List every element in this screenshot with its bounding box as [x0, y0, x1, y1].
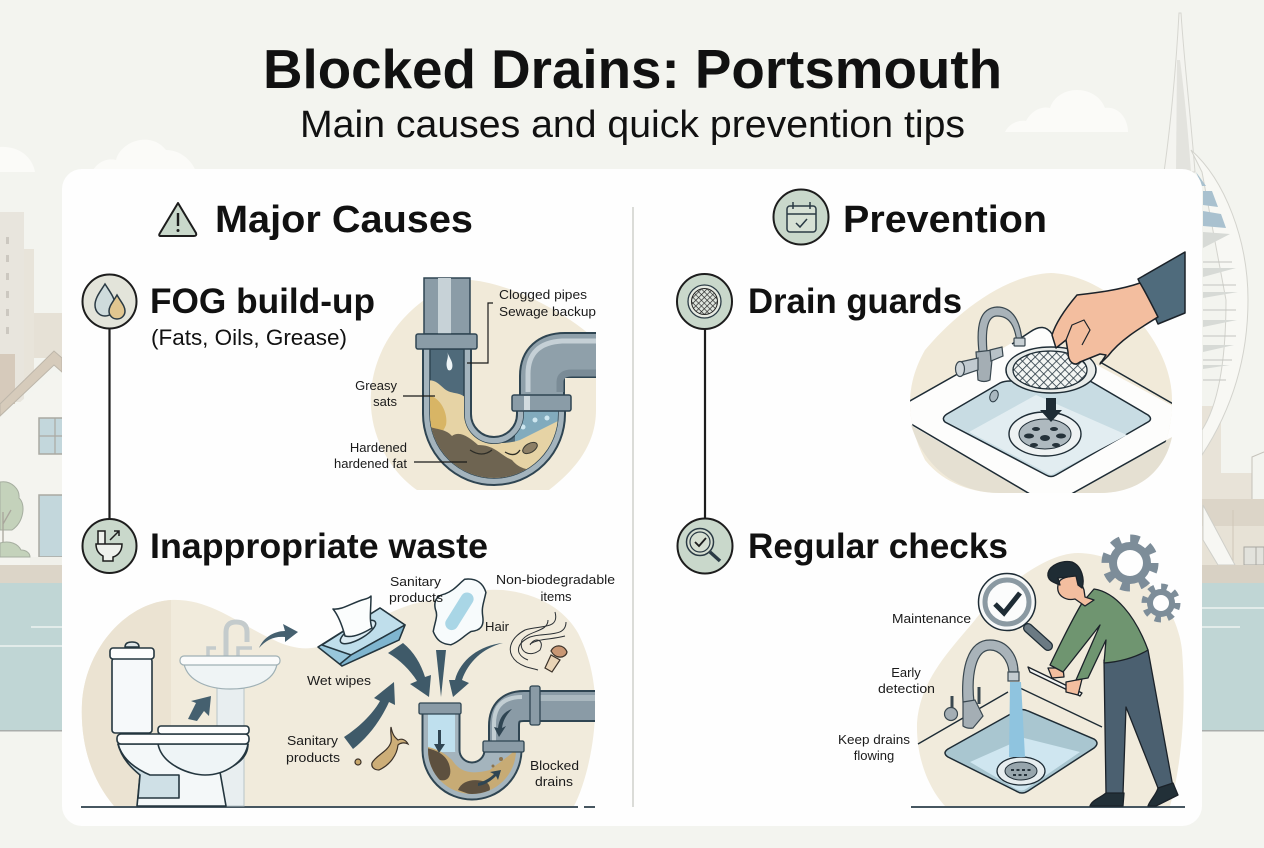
backdrop blob	[917, 553, 1184, 806]
water	[0, 583, 1264, 732]
left trees	[0, 482, 30, 557]
label: hair: Hair	[485, 619, 510, 634]
label: clogged pipes, sewage backup	[467, 287, 596, 363]
label: maintenance: Maintenance	[892, 611, 971, 626]
arrow: pad to drain	[436, 650, 446, 697]
label: non-biodegradable items	[496, 572, 615, 604]
icon: oil drops	[82, 274, 136, 328]
label: early detection	[878, 665, 935, 696]
elbow pipe	[528, 341, 596, 396]
sanitary pad	[418, 568, 501, 656]
label: keep drains flowing: flowing	[854, 748, 894, 763]
icon: magnifier check	[678, 518, 732, 574]
label: clogged pipes, sewage backup: Sewage backup	[499, 304, 596, 319]
timeline connector: prevention	[704, 329, 706, 519]
counter and sink basin	[900, 327, 1180, 497]
hand and sleeve	[1052, 252, 1185, 364]
label: keep drains flowing	[838, 732, 911, 763]
panel: major causes	[81, 199, 615, 807]
clogged U-bend	[425, 712, 520, 800]
left house	[0, 351, 63, 565]
main card	[62, 169, 1202, 826]
heading: regular checks: Regular checks	[748, 527, 1008, 566]
trousers	[1104, 650, 1173, 794]
lower counter shade	[911, 425, 1172, 493]
icon: toilet	[82, 519, 136, 573]
label: sanitary products (top): Sanitary	[390, 574, 442, 589]
panel: prevention	[677, 190, 1185, 807]
pipe collars	[419, 703, 524, 752]
label: clogged pipes, sewage backup: Clogged pipes	[499, 287, 588, 302]
subtitle: Main causes and quick prevention tips	[300, 104, 965, 146]
illustration: drain guard on sink	[900, 252, 1185, 497]
magnifying glass with check	[978, 574, 1048, 646]
label: non-biodegradable items: items	[540, 589, 572, 604]
label: blocked drains: drains	[535, 774, 574, 789]
cloud centre-left	[92, 140, 196, 172]
arrow: wipes to drain	[388, 643, 431, 697]
label: hardened fat: Hardened	[350, 440, 407, 455]
heading: major causes: Major Causes	[215, 199, 473, 241]
pipe contents: water, grease and hardened fat	[430, 352, 558, 478]
text: fats oils grease: (Fats, Oils, Grease)	[151, 325, 347, 350]
person checking drain	[1028, 562, 1178, 806]
illustration: FOG in trap	[334, 278, 596, 492]
sink	[180, 622, 280, 806]
floor line	[911, 806, 1185, 808]
label: sanitary products (top)	[389, 574, 444, 605]
head	[1058, 574, 1094, 606]
label: sanitary products (top): products	[389, 590, 444, 605]
heading: prevention: Prevention	[843, 199, 1047, 241]
heading: FOG build-up: FOG build-up	[150, 282, 375, 321]
vertical pipe	[424, 278, 470, 334]
label: blocked drains: Blocked	[530, 758, 579, 773]
sink basin	[945, 710, 1097, 793]
faucet	[956, 307, 1025, 382]
left city buildings	[0, 212, 62, 404]
arrow: sanitary products to drain	[344, 682, 395, 749]
arrow: hair to drain	[449, 643, 503, 697]
label: wet wipes: Wet wipes	[307, 673, 372, 688]
counter lines	[918, 688, 1102, 744]
hair strands	[510, 612, 566, 670]
illustration: regular checks	[838, 539, 1185, 807]
cloud left	[0, 147, 35, 172]
label: sanitary products (lower)	[286, 733, 341, 765]
hands and tool	[1028, 667, 1082, 696]
label: sanitary products (lower): products	[286, 750, 341, 765]
collars	[416, 334, 571, 411]
icon: drain guard	[677, 274, 732, 329]
water stream	[1009, 682, 1025, 757]
label: greasy sats	[355, 378, 435, 409]
U-bend	[430, 349, 558, 478]
right buildings behind tower	[1202, 400, 1264, 565]
toilet	[110, 642, 249, 806]
mushroom	[545, 646, 567, 672]
label: non-biodegradable items: Non-biodegradable	[496, 572, 615, 587]
backdrop blob	[910, 273, 1172, 493]
centre divider	[632, 207, 634, 807]
cloud right	[1005, 90, 1128, 132]
label: blocked drains	[530, 758, 579, 789]
heading: prevention	[774, 190, 1047, 244]
floor line	[81, 806, 595, 808]
shoes	[1090, 783, 1178, 806]
sweater	[1050, 589, 1148, 680]
gears	[1106, 539, 1177, 619]
backdrop blob	[371, 280, 596, 490]
elbow to wall pipe	[494, 686, 595, 746]
arrow: sink to wipes	[259, 624, 298, 648]
label: hardened fat: hardened fat	[334, 456, 407, 471]
arrow: toilet to sink	[188, 696, 211, 721]
drain	[1009, 412, 1081, 456]
label: hardened fat	[334, 440, 467, 471]
label: early detection: Early	[891, 665, 921, 680]
banana peel and dot	[355, 727, 408, 770]
drain guard mesh	[1006, 347, 1096, 393]
label: early detection: detection	[878, 681, 935, 696]
arrow: guard down into drain	[1040, 398, 1062, 422]
title: Blocked Drains: Portsmouth	[263, 38, 1002, 100]
ground strips	[0, 565, 62, 583]
wet wipes pack	[318, 596, 405, 666]
icon: calendar	[774, 190, 828, 244]
illustration: inappropriate waste	[81, 568, 615, 807]
backdrop blob	[82, 590, 595, 806]
label: keep drains flowing: Keep drains	[838, 732, 911, 747]
label: greasy sats: sats	[373, 394, 397, 409]
heading: inappropriate waste: Inappropriate waste	[150, 527, 488, 566]
icon: warning triangle	[159, 203, 196, 236]
label: sanitary products (lower): Sanitary	[287, 733, 339, 748]
heading: drain guards: Drain guards	[748, 282, 962, 321]
timeline connector: causes	[108, 329, 111, 519]
label: greasy sats: Greasy	[355, 378, 397, 393]
Spinnaker Tower	[1164, 13, 1248, 565]
faucet	[944, 640, 1019, 728]
